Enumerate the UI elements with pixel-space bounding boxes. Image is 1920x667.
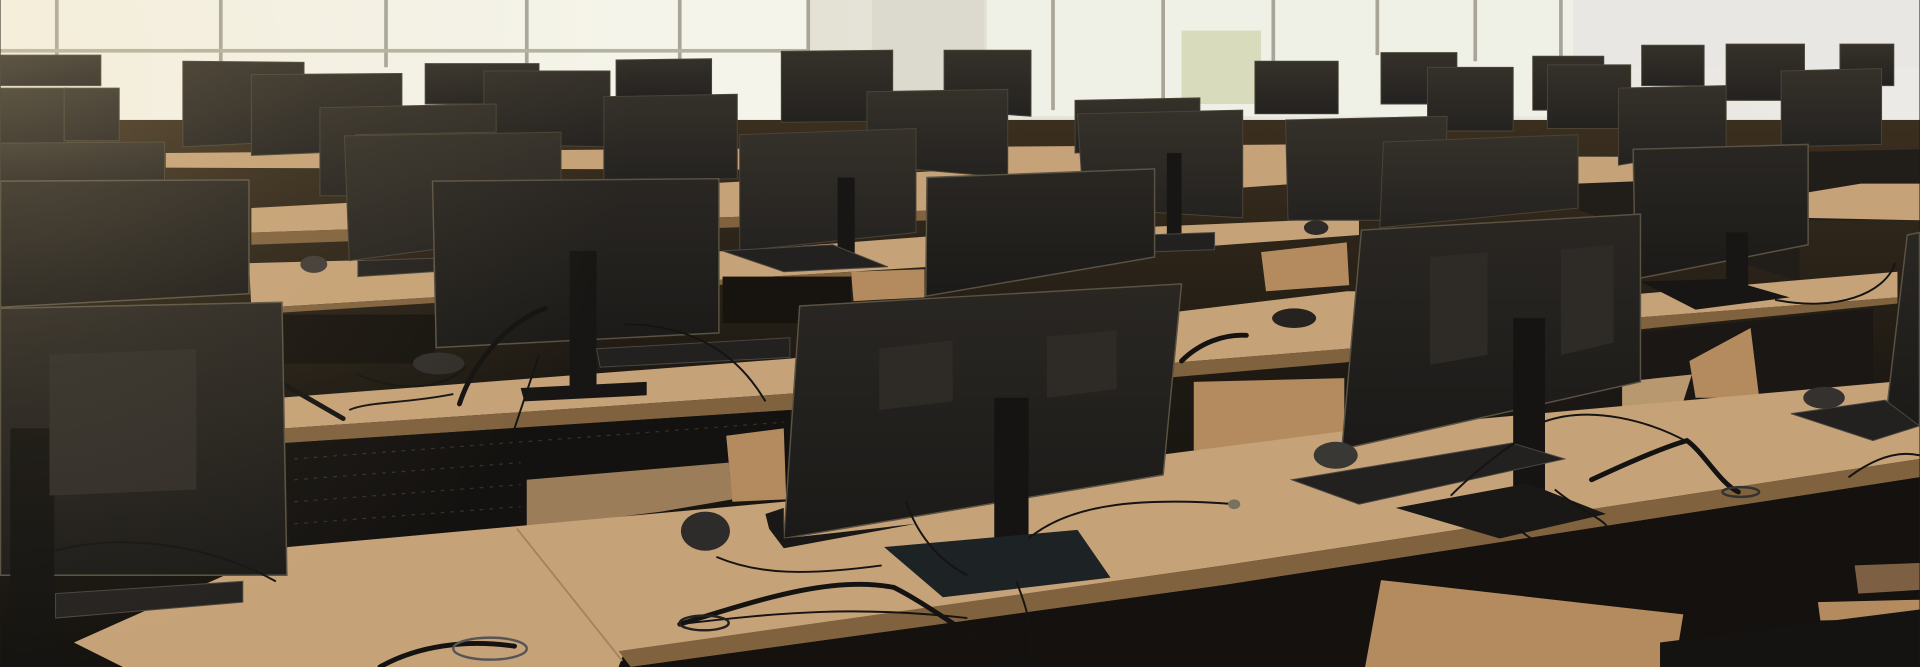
second row desk xyxy=(280,272,1897,547)
monitor: far left xyxy=(0,302,287,575)
monitor: right xyxy=(1342,214,1640,449)
back wall and windows xyxy=(0,0,1920,171)
third row desk xyxy=(249,218,1359,363)
large row monitors xyxy=(0,144,1895,428)
back row monitors xyxy=(0,44,1894,155)
front row monitors xyxy=(0,214,1920,667)
vent grilles xyxy=(49,245,1614,496)
back desks xyxy=(166,144,1920,281)
monitor: centre xyxy=(784,284,1182,538)
chairs xyxy=(726,242,1759,502)
front desk xyxy=(74,379,1920,667)
monitor: far right edge xyxy=(1885,233,1920,426)
stands xyxy=(10,318,1606,667)
front chairs and seat xyxy=(1365,563,1920,667)
middle row monitors xyxy=(0,69,1882,277)
cables xyxy=(56,415,1920,667)
keyboards and mice xyxy=(56,387,1920,618)
